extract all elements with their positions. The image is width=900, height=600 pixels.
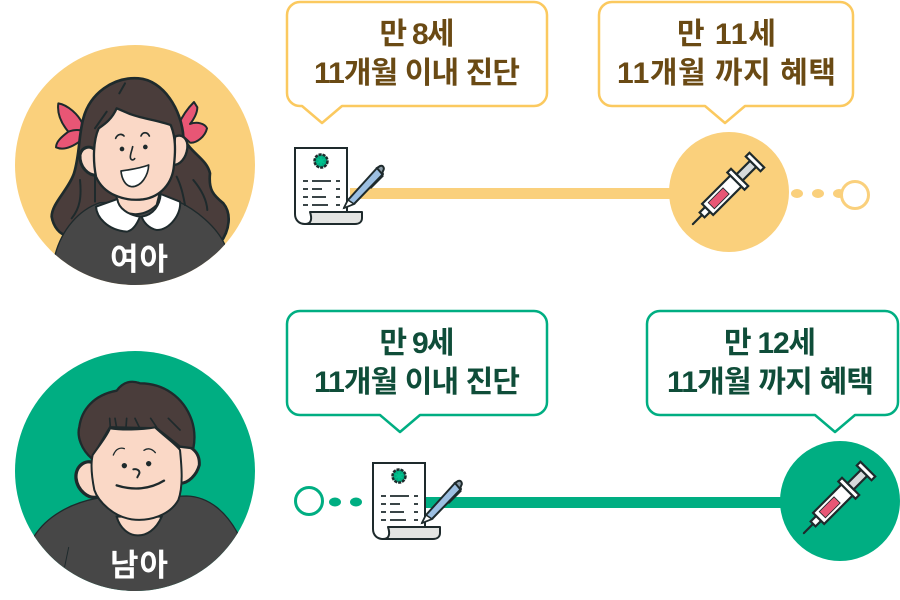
hair <box>52 78 229 243</box>
collar <box>96 199 140 232</box>
dotted tail: girl <box>791 182 868 208</box>
mouth <box>121 165 149 187</box>
callout: girl benefit <box>599 2 853 123</box>
icon: document and pen (boy) <box>373 463 462 539</box>
ears <box>76 462 98 497</box>
timeline line: boy <box>425 497 790 508</box>
eyes <box>120 147 124 151</box>
callout: boy benefit: 11개월 까지 혜택 <box>667 366 874 399</box>
callout: boy diagnosis: 만 9세 <box>380 327 454 360</box>
fringe <box>110 418 180 430</box>
ear left <box>80 147 98 175</box>
avatar: boy <box>15 351 255 600</box>
face <box>94 108 175 200</box>
callout: boy diagnosis <box>287 311 547 432</box>
callout: girl diagnosis: 만 8세 <box>380 18 454 51</box>
body <box>34 496 237 600</box>
neck <box>117 192 160 214</box>
ribbons <box>58 103 82 132</box>
label: girl: 여아 <box>110 242 168 277</box>
face <box>92 427 182 520</box>
callout: boy diagnosis: 11개월 이내 진단 <box>314 366 520 399</box>
eyes <box>122 463 127 468</box>
icon: syringe (boy) <box>780 441 900 561</box>
neck <box>117 517 162 535</box>
dotted start: boy <box>296 488 362 514</box>
callout: boy benefit <box>647 311 898 432</box>
callout: boy benefit: 만 12세 <box>724 327 816 360</box>
avatar: girl <box>15 45 255 297</box>
hair strands <box>72 83 207 218</box>
icon: syringe (girl) <box>669 132 789 252</box>
brows and nose <box>116 133 149 160</box>
ear right <box>173 136 187 165</box>
callout: girl benefit: 11개월 까지 혜택 <box>617 57 836 90</box>
body <box>54 202 226 285</box>
brows, nose, mouth <box>113 448 155 455</box>
icon: document and pen (girl) <box>295 148 384 224</box>
callout: girl diagnosis: 11개월 이내 진단 <box>314 57 520 90</box>
label: boy: 남아 <box>110 548 168 583</box>
callout: girl benefit: 만 11세 <box>677 18 776 51</box>
callout: girl diagnosis <box>287 2 547 123</box>
sleeve line <box>65 547 69 567</box>
timeline line: girl <box>350 188 680 199</box>
hair <box>79 382 194 458</box>
